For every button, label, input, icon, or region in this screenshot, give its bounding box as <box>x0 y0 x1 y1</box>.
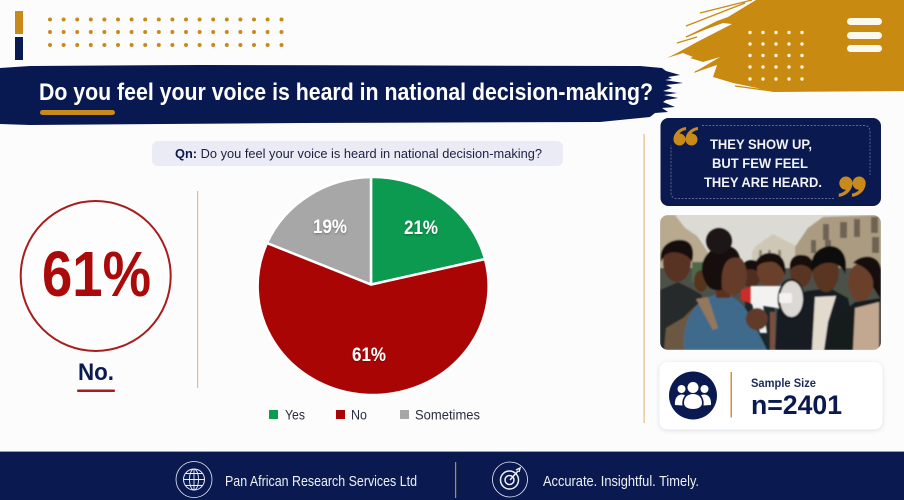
title banner <box>0 65 683 125</box>
icon: menu <box>847 18 882 52</box>
icon: opening quote <box>674 127 698 146</box>
right woman <box>849 298 881 347</box>
legend: Sometimes <box>415 408 480 422</box>
key stat: 61% No <box>21 201 171 392</box>
second woman <box>757 253 785 287</box>
card divider <box>730 372 732 418</box>
stat ring <box>21 201 171 351</box>
quote card <box>660 118 881 206</box>
title: Do you feel your voice is heard in national decision-making? <box>39 79 653 106</box>
white dot grid <box>748 31 804 81</box>
decorative gold dot grid <box>48 18 284 47</box>
icon: closing quote <box>839 177 866 197</box>
fourth man <box>812 296 836 350</box>
left man <box>660 282 702 350</box>
quote text: THEY SHOW UP, <box>710 137 812 152</box>
legend <box>269 408 480 422</box>
question pill: Qn: Do you feel your voice is heard in national decision-making? <box>175 147 542 161</box>
stat label: No. <box>78 359 114 386</box>
background figures <box>694 270 708 292</box>
megaphone <box>741 279 804 333</box>
photo: woman with megaphone in crowd <box>660 215 881 350</box>
label 21%: 21% <box>404 218 438 239</box>
slice: no 61% <box>258 243 489 395</box>
quote text: THEY ARE HEARD. <box>704 175 822 190</box>
company name: Pan African Research Services Ltd <box>225 474 417 490</box>
legend: Yes <box>285 408 305 422</box>
label 61%: 61% <box>352 345 386 366</box>
footer bar <box>0 451 904 500</box>
megaphone woman jacket <box>684 294 767 350</box>
label 19%: 19% <box>313 217 347 238</box>
tagline: Accurate. Insightful. Timely. <box>543 474 699 490</box>
divider right <box>644 134 645 423</box>
quote text <box>704 137 822 190</box>
third man <box>790 264 813 287</box>
question pill <box>152 141 563 166</box>
footer divider <box>455 462 456 498</box>
icon: target <box>492 462 528 497</box>
dark jackets right <box>774 289 850 350</box>
gold brush stroke with menu icon <box>667 0 904 92</box>
crowd backdrop <box>660 268 881 350</box>
slice: yes 21% <box>371 177 485 284</box>
icon: globe <box>176 462 212 498</box>
slice: sometimes 19% <box>267 177 371 284</box>
decorative accent bars <box>15 11 23 60</box>
icon: people group <box>669 372 717 420</box>
sample size label: Sample Size <box>751 378 816 390</box>
pie chart <box>258 177 489 395</box>
stat value: 61% <box>42 238 151 310</box>
megaphone woman head <box>715 286 731 299</box>
stat underline <box>77 390 115 392</box>
quote text: BUT FEW FEEL <box>712 156 808 171</box>
title underline <box>40 110 115 115</box>
sample size card <box>660 362 882 430</box>
divider left <box>197 191 198 388</box>
legend: No <box>351 408 367 422</box>
sample size value: n=2401 <box>751 390 842 420</box>
